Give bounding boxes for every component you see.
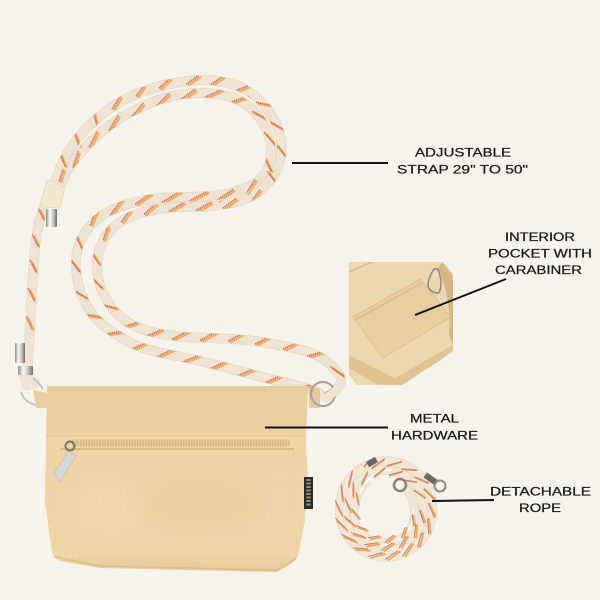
brand label [304, 477, 313, 509]
metal collar [18, 366, 33, 375]
label: STRAP 29" TO 50" [397, 162, 528, 176]
metal tip: upper [46, 209, 57, 227]
interior pocket photo [349, 262, 453, 385]
coil wrap [353, 464, 366, 478]
carabiner [428, 269, 441, 293]
metal tip: lower [15, 343, 25, 363]
pocket [353, 279, 451, 358]
coil tip [366, 457, 378, 467]
label: METAL [410, 412, 459, 426]
strap rope [26, 75, 346, 399]
coil stripes: mauve [333, 457, 437, 561]
leader line [265, 426, 388, 428]
left hardware [15, 343, 47, 408]
lining top seam [349, 262, 372, 272]
rope stripes [26, 75, 346, 399]
leader line [292, 162, 388, 164]
rope wrap [40, 180, 65, 208]
zipper pull [54, 442, 76, 482]
coil ring left [394, 479, 406, 491]
label: INTERIOR [505, 230, 575, 244]
callout: adjustable strap [292, 146, 528, 176]
photo lining [349, 262, 453, 385]
coiled rope [333, 457, 446, 561]
rope strand: outer [27, 80, 341, 397]
bag body [45, 448, 308, 572]
rope end loop [24, 376, 34, 384]
rope strand: inner [60, 93, 320, 393]
callout: metal hardware [265, 412, 478, 442]
left tab [33, 390, 47, 408]
leader line [432, 500, 494, 501]
label [391, 412, 478, 442]
coil right tips [424, 473, 438, 485]
label: DETACHABLE [490, 484, 591, 498]
zipper band [46, 436, 306, 449]
coil white inner line [360, 470, 413, 546]
coil stripes: orange [336, 460, 436, 560]
bag flap [46, 386, 308, 437]
left ring [21, 378, 43, 405]
callout: interior pocket [415, 230, 592, 315]
label [488, 230, 592, 277]
right ring [311, 382, 335, 406]
red stripes [26, 75, 344, 397]
coil loops [340, 461, 432, 557]
orange stripes [28, 77, 346, 399]
label: POCKET WITH [488, 246, 592, 260]
label: ADJUSTABLE [415, 146, 511, 160]
coil ring right [434, 480, 446, 492]
bag [40, 386, 313, 575]
callout: detachable rope [432, 484, 591, 515]
right tab [309, 388, 320, 408]
label: CARABINER [495, 263, 582, 277]
infographic canvas [15, 75, 591, 572]
right hardware [309, 382, 335, 408]
leader line [415, 279, 506, 315]
lining shaded edges [438, 262, 453, 345]
label [397, 146, 528, 176]
label [490, 484, 591, 515]
rope end over ring [324, 382, 342, 398]
label: ROPE [519, 501, 561, 515]
label: HARDWARE [391, 428, 478, 442]
